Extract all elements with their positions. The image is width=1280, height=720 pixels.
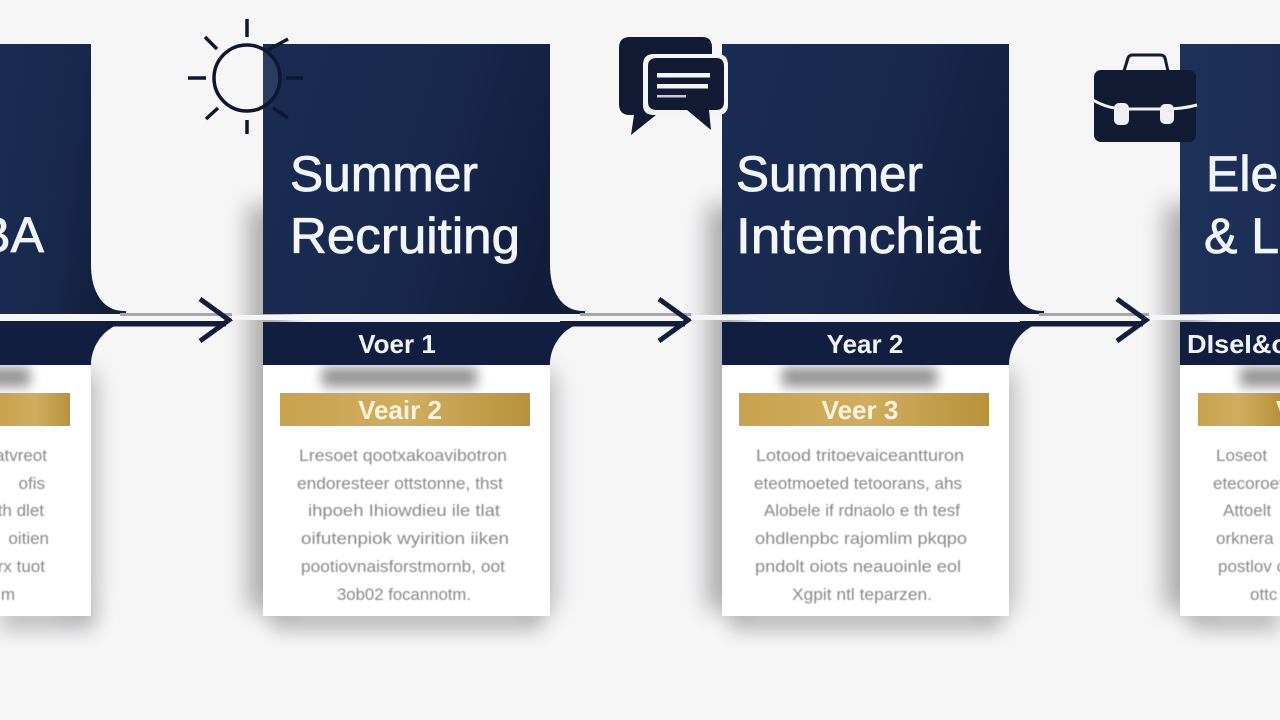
arrow: to Electives (691, 299, 1280, 341)
text block: description: Loseot (1216, 446, 1267, 465)
arrow: to Summer Internship (232, 299, 691, 341)
text block: description: 3ob02 focannotm. (337, 585, 471, 604)
text block: description: Attoelt (1223, 501, 1271, 520)
text block: description: ihpoeh Ihiowdieu ile tlat (308, 501, 500, 520)
arrow: to Summer Recruiting (0, 299, 232, 341)
text block: description: Lotood tritoevaiceantturon (756, 446, 964, 465)
text block: description: oifutenpiok wyirition iiken (301, 529, 509, 548)
text block: description: ottc (1250, 585, 1278, 604)
label: gold bar (1198, 393, 1280, 426)
heading: Summer Intemchiat: Summer (736, 146, 923, 202)
icon: sun (188, 19, 303, 134)
text block: description: eteotmoeted tetoorans, ahs (754, 474, 962, 493)
panel: Summer Internship card (707, 44, 1048, 630)
panel: MBA card (cropped): m (1, 585, 15, 604)
icon: chat bubbles (619, 37, 728, 135)
heading: Summer Intemchiat: Intemchiat (736, 208, 981, 264)
icon: briefcase (1093, 55, 1197, 142)
label: gold year bar (739, 393, 989, 426)
text block: description: endoresteer ottstonne, thst (297, 474, 503, 493)
text block: description: orknera (1216, 529, 1274, 548)
text block: description: pootiovnaisforstmornb, oot (301, 557, 505, 576)
label: year band: Voer 1 (358, 329, 436, 359)
heading: Summer Recruiting: Recruiting (290, 208, 520, 264)
heading: Summer Recruiting: Summer (290, 146, 478, 202)
panel: MBA card (cropped): ofis (19, 474, 45, 493)
panel: MBA card (cropped): oitien (8, 529, 49, 548)
label: gold year bar: Veair 2 (358, 395, 442, 425)
heading: Summer Recruiting (290, 146, 520, 264)
panel: Electives card (cropped) (1165, 44, 1280, 630)
text block: description: Xgpit ntl teparzen. (792, 585, 932, 604)
text block: description: pndolt oiots neauoinle eol (755, 557, 961, 576)
heading: Electives: & L (1204, 208, 1279, 264)
text block: description (754, 446, 967, 604)
panel: MBA card (cropped) (0, 44, 130, 630)
heading: Electives (1204, 146, 1280, 264)
text block: description: Lresoet qootxakoavibotron (299, 446, 507, 465)
panel: Summer Recruiting card (248, 44, 589, 630)
heading: Summer Intemchiat (736, 146, 981, 264)
text block: description (297, 446, 509, 604)
label: gold year bar: Veer 3 (822, 395, 898, 425)
text block: description (1213, 446, 1280, 604)
text block: description: Alobele if rdnaolo e th tesf (764, 501, 960, 520)
text block: description: ohdlenpbc rajomlim pkqpo (755, 529, 967, 548)
label: gold year bar (280, 393, 530, 426)
label: year band: Year 2 (827, 329, 903, 359)
